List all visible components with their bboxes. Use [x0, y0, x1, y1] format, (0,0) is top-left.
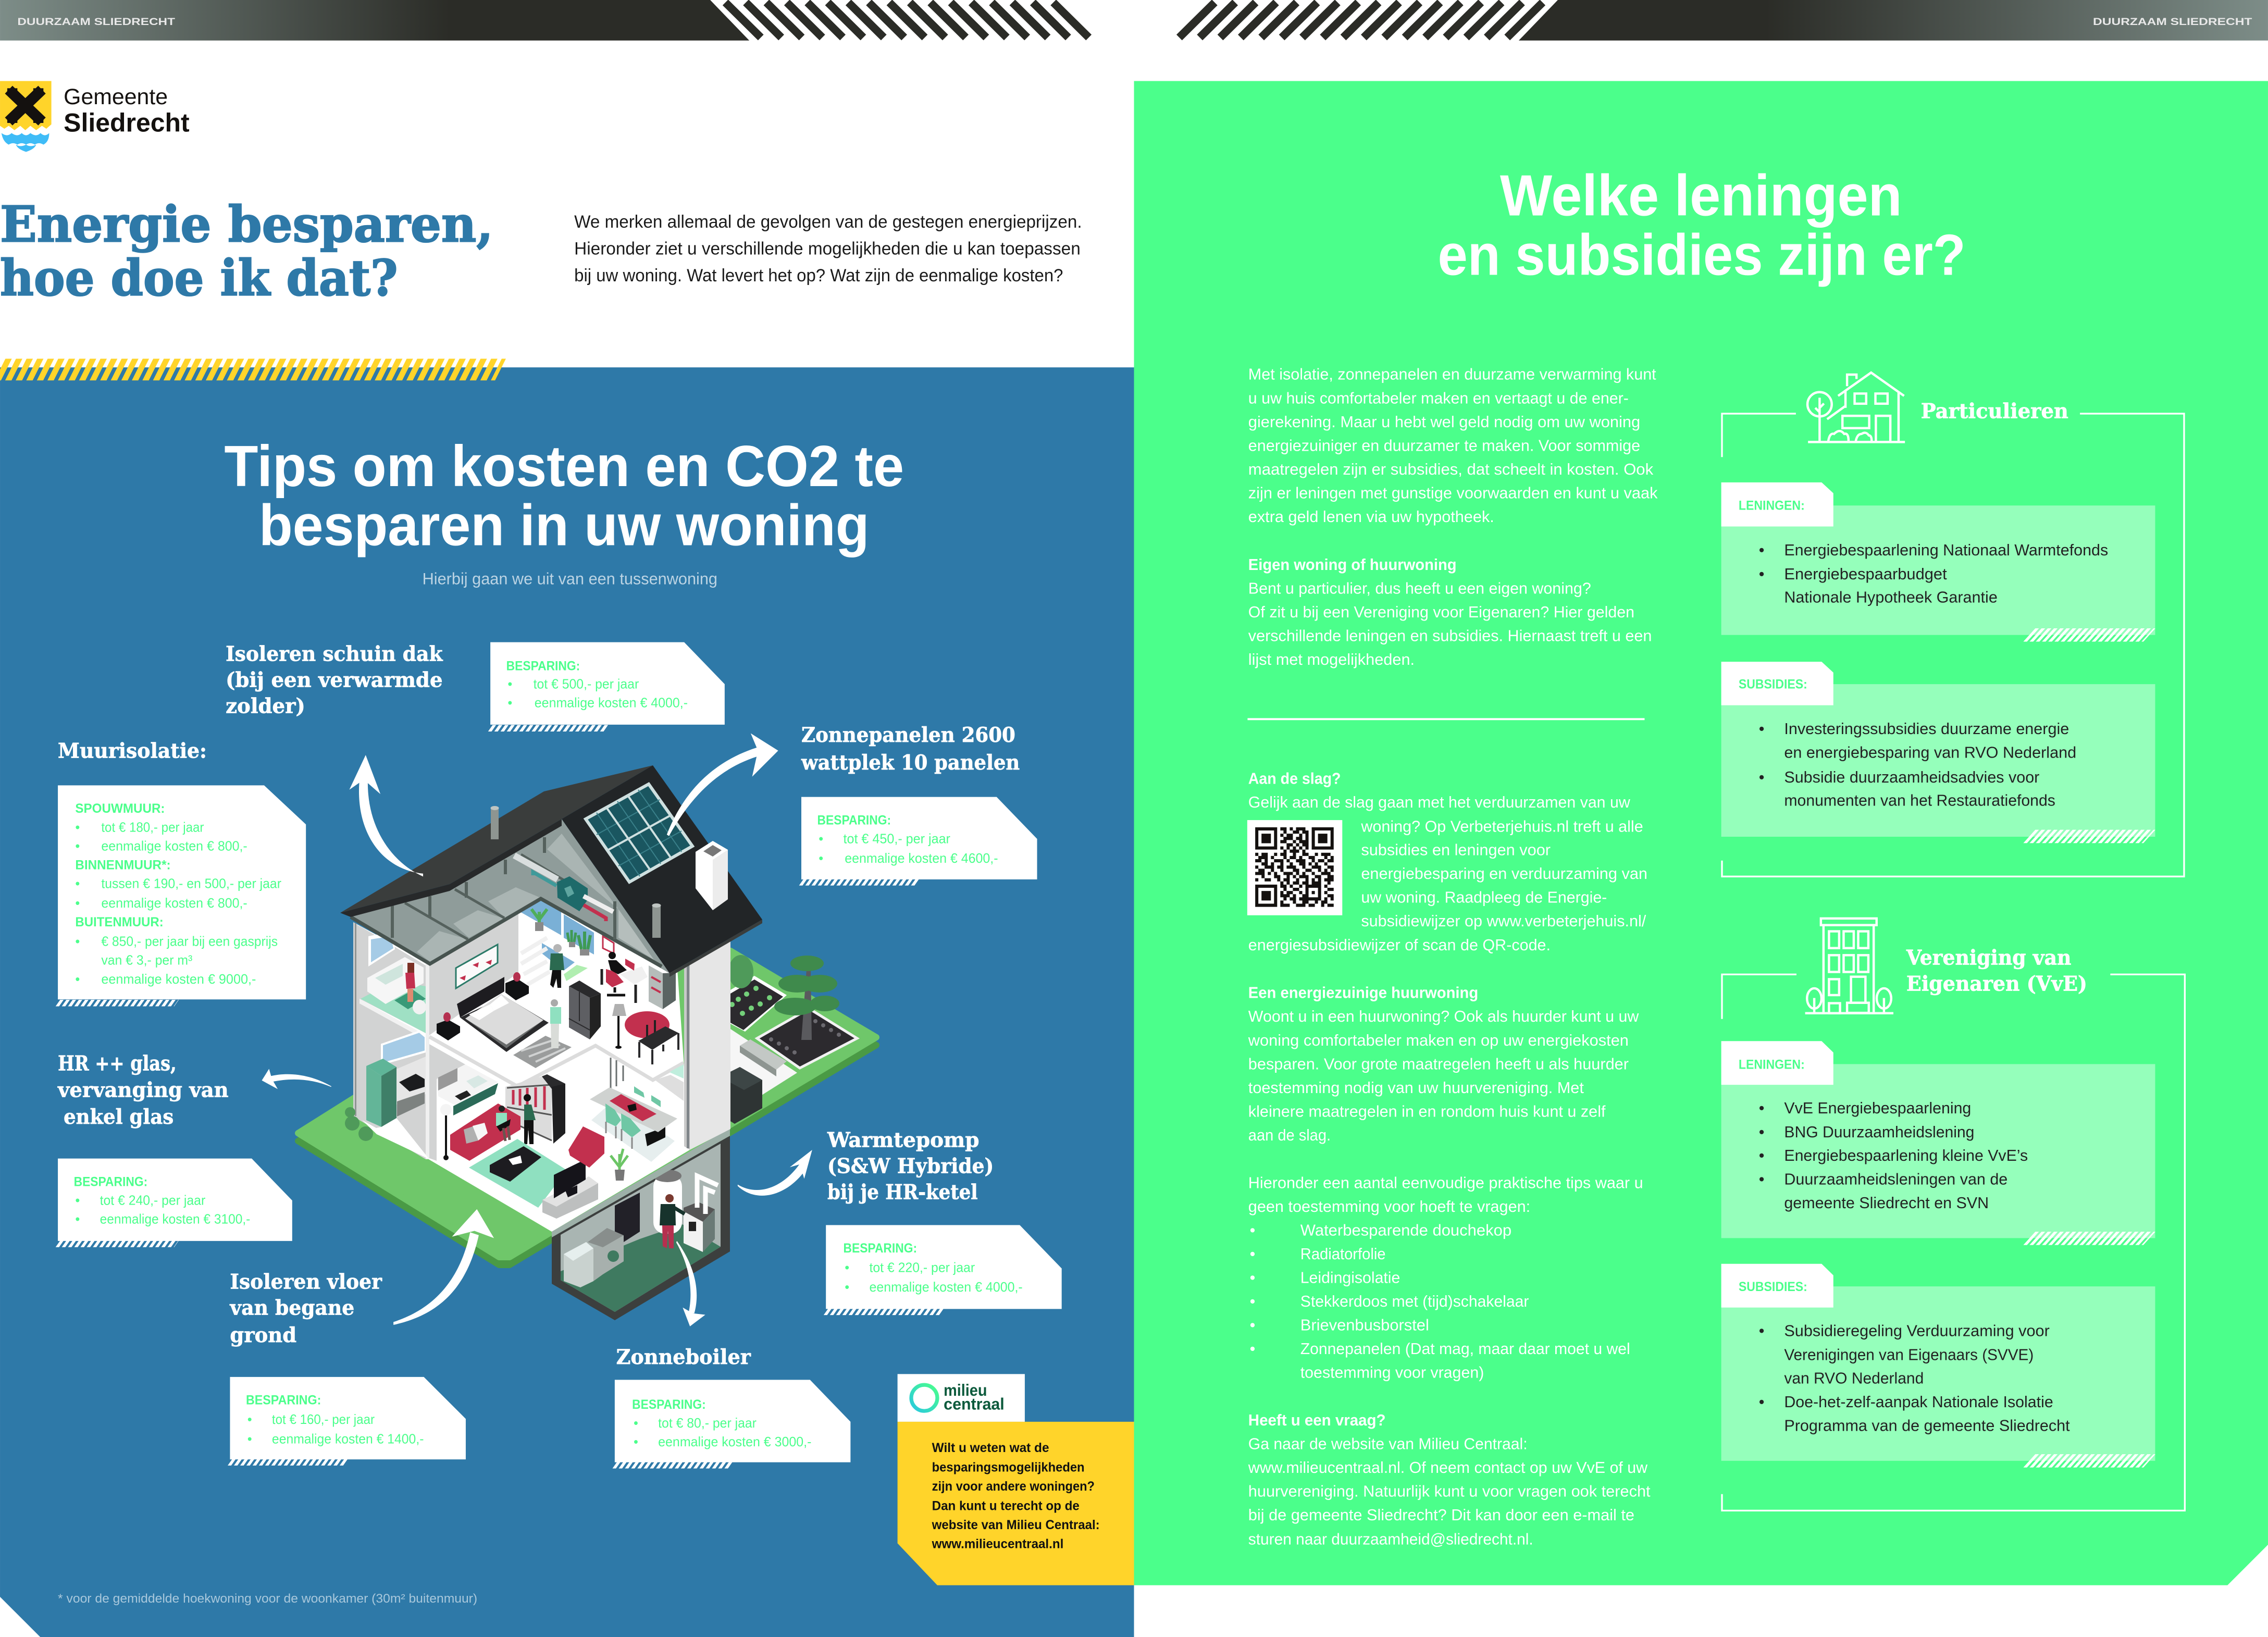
text block: questions: Heeft u een vraag?: [1248, 1411, 1386, 1429]
card: roof insulation savings: BESPARING:: [506, 659, 580, 674]
right gable wall: [684, 941, 730, 1150]
card: private subsidies: •: [1759, 720, 1764, 738]
arrow: floor insulation: [393, 1209, 494, 1325]
text block: get started: Aan de slag?: [1248, 770, 1341, 788]
card: private loans: •: [1759, 541, 1764, 559]
text block: get started: [1248, 770, 1647, 954]
card: glass savings: BESPARING:: [74, 1174, 147, 1189]
heading: tips: Tips om kosten en CO2 te: [224, 433, 904, 499]
text block: introduction: zijn er leningen met gunstige voorwaarden en kunt u vaak: [1248, 485, 1658, 502]
card: association loans: VvE Energiebespaarlening: [1784, 1099, 1971, 1117]
card: solar savings: •: [819, 851, 823, 866]
logo: Gemeente Sliedrecht: Gemeente: [64, 84, 168, 109]
card: floor savings: tot € 160,- per jaar: [272, 1412, 375, 1427]
card: heat pump savings: BESPARING:: [844, 1241, 917, 1256]
card: wall insulation savings: tot € 180,- per jaar: [101, 820, 204, 835]
card: roof insulation savings: eenmalige kosten € 4000,-: [535, 696, 688, 711]
arrow: glass: [262, 1069, 331, 1089]
wardrobe: [569, 981, 601, 1039]
card: private loans: LENINGEN:: [1739, 499, 1805, 513]
text block: practical tips list: Stekkerdoos met (tijd)schakelaar: [1300, 1293, 1529, 1310]
intro text: bij uw woning. Wat levert het op? Wat zijn de eenmalige kosten?: [574, 266, 1063, 286]
card: roof insulation savings: [490, 642, 725, 728]
card: private loans: Nationale Hypotheek Garantie: [1784, 589, 1998, 606]
card: solar boiler savings: [615, 1380, 850, 1465]
panel: blue tips panel: [0, 367, 1134, 1637]
callout: more information: www.milieucentraal.nl: [932, 1537, 1063, 1552]
label: roof insulation: Isoleren schuin dak: [226, 643, 443, 666]
card: wall insulation savings: van € 3,- per m³: [101, 953, 192, 968]
card: private loans: Energiebespaarlening Nationaal Warmtefonds: [1784, 541, 2108, 559]
bathroom: [360, 926, 426, 1040]
vent pipe on right roof: [652, 903, 661, 938]
label: heat pump: Warmtepomp: [827, 1128, 979, 1152]
text block: get started: woning? Op Verbeterjehuis.nl treft u alle: [1360, 817, 1643, 835]
boiler: [684, 1176, 718, 1252]
sink and washer: [564, 1228, 624, 1287]
plants by window: [531, 909, 590, 956]
card: wall insulation savings: •: [75, 935, 80, 949]
heading: Vereniging van Eigenaren: Vereniging van: [1906, 947, 2071, 970]
label: HR glass: vervanging van: [57, 1079, 229, 1102]
pendant lamps: [611, 1058, 623, 1092]
card: floor savings: BESPARING:: [246, 1393, 321, 1408]
text block: get started: subsidies en leningen voor: [1361, 841, 1551, 859]
card: floor savings: [230, 1377, 466, 1462]
bedroom rug: [513, 1036, 572, 1068]
nightstands: [437, 972, 529, 1040]
card: wall insulation savings: •: [75, 896, 80, 911]
card: private loans: [1721, 482, 2155, 635]
upper floor front edge: [429, 1037, 684, 1086]
card: association subsidies: Subsidieregeling Verduurzaming voor: [1784, 1322, 2050, 1340]
label: floor insulation: Isoleren vloer: [230, 1271, 382, 1294]
ventilation unit: [514, 855, 613, 921]
wall painting: [456, 945, 498, 988]
heading: loans and subsidies: en subsidies zijn er?: [1437, 222, 1966, 287]
card: association loans: •: [1759, 1123, 1764, 1141]
card: association loans: LENINGEN:: [1739, 1058, 1805, 1072]
card: wall insulation savings: tussen € 190,- en 500,- per jaar: [101, 877, 281, 891]
hot water tank: [653, 1170, 682, 1234]
text block: practical tips list: [1248, 1174, 1643, 1382]
text block: practical tips list: toestemming voor vragen): [1300, 1364, 1484, 1382]
icon: house: [1807, 373, 1905, 442]
card: wall insulation savings: •: [75, 839, 80, 853]
intro text: We merken allemaal de gevolgen van de gestegen energieprijzen.: [574, 212, 1082, 232]
card: wall insulation savings: eenmalige kosten € 800,-: [101, 839, 247, 853]
floor slab edge: [552, 1128, 730, 1237]
label: roof insulation: zolder): [226, 695, 305, 718]
card: wall insulation savings: BINNENMUUR*:: [75, 858, 171, 872]
label: roof insulation: [226, 643, 443, 718]
text block: rental home: woning comfortabeler maken en op uw energiekosten: [1248, 1032, 1629, 1049]
text block: get started: Gelijk aan de slag gaan met het verduurzamen van uw: [1248, 793, 1631, 811]
callout: more information: website van Milieu Centraal:: [932, 1518, 1100, 1532]
callout: more information: besparingsmogelijkheden: [932, 1460, 1085, 1474]
card: heat pump savings: tot € 220,- per jaar: [869, 1261, 975, 1275]
text block: get started: uw woning. Raadpleeg de Energie-: [1361, 888, 1607, 906]
text block: questions: bij de gemeente Sliedrecht? Dit kan door een e-mail te: [1248, 1506, 1634, 1524]
header bar right: DUURZAAM SLIEDRECHT: [2093, 16, 2252, 28]
card: association loans: [1721, 1041, 2155, 1238]
bedroom wall: [429, 913, 518, 1035]
text block: practical tips list: geen toestemming voor hoeft te vragen:: [1248, 1198, 1530, 1216]
logo: Gemeente Sliedrecht: [0, 81, 190, 152]
card: glass savings: tot € 240,- per jaar: [100, 1193, 206, 1208]
logo: Gemeente Sliedrecht: Sliedrecht: [64, 108, 190, 138]
title: Energie besparen: hoe doe ik dat?: [0, 249, 398, 307]
text block: own home or rental: Of zit u bij een Vereniging voor Eigenaren? Hier gelden: [1248, 603, 1634, 621]
arrow: solar boiler: [676, 1241, 705, 1326]
card: association loans: BNG Duurzaamheidslening: [1784, 1123, 1974, 1141]
card: association subsidies: Verenigingen van Eigenaars (SVVE): [1784, 1346, 2034, 1364]
card: heat pump savings: •: [845, 1280, 849, 1295]
card: private loans: Energiebespaarbudget: [1784, 565, 1947, 583]
card: private loans: •: [1759, 565, 1764, 583]
patio and bench: [730, 1029, 797, 1115]
bushes: [345, 1107, 373, 1141]
text block: introduction: extra geld lenen via uw hypotheek.: [1248, 508, 1494, 526]
card: wall insulation savings: BUITENMUUR:: [75, 915, 164, 929]
card: heat pump savings: •: [845, 1261, 849, 1275]
card: heat pump savings: [826, 1225, 1062, 1312]
card: private subsidies: •: [1759, 768, 1764, 786]
text block: practical tips list: •: [1250, 1221, 1255, 1239]
coffee table: [490, 1146, 541, 1182]
card: association subsidies: •: [1759, 1393, 1764, 1411]
card: association loans: •: [1759, 1171, 1764, 1188]
label: HR glass: [57, 1052, 229, 1129]
kitchen unit: [429, 1044, 498, 1161]
bookcase: [505, 1074, 565, 1144]
label: HR glass: enkel glas: [64, 1106, 173, 1129]
basement: [552, 1136, 730, 1320]
person with glasses: [550, 944, 564, 988]
icon: municipal shield: [0, 81, 52, 152]
card: private subsidies: Subsidie duurzaamheidsadvies voor: [1784, 768, 2039, 786]
armchair: [568, 1126, 604, 1168]
card: glass savings: [58, 1159, 292, 1244]
potted plant: [611, 1149, 628, 1181]
card: solar savings: tot € 450,- per jaar: [844, 832, 950, 846]
arrow: roof insulation: [349, 755, 423, 876]
card: private subsidies: en energiebesparing van RVO Nederland: [1784, 744, 2076, 762]
logo: Milieu Centraal: centraal: [944, 1395, 1005, 1413]
illustration: isometric house cross-section: [298, 765, 876, 1320]
callout: more information: Wilt u weten wat de: [932, 1441, 1049, 1455]
text block: practical tips list: •: [1250, 1340, 1255, 1358]
text block: practical tips list: •: [1250, 1293, 1255, 1310]
panel: owners associations: [1721, 919, 2185, 1510]
text block: rental home: aan de slag.: [1248, 1126, 1331, 1144]
arrow: solar panels: [667, 733, 778, 836]
label: solar panels: [801, 724, 1020, 775]
heading: tips: besparen in uw woning: [259, 493, 869, 558]
card: wall insulation savings: •: [75, 972, 80, 987]
tree bed: [757, 956, 857, 1068]
round rug and table: [625, 1011, 679, 1064]
heat pump outdoor unit: [730, 1067, 762, 1124]
label: heat pump: bij je HR-ketel: [827, 1181, 978, 1204]
back windows: [520, 900, 594, 981]
chimney: [696, 841, 728, 910]
card: roof insulation savings: •: [507, 677, 512, 691]
card: association subsidies: •: [1759, 1322, 1764, 1340]
text block: rental home: Woont u in een huurwoning? Ook als huurder kunt u uw: [1248, 1008, 1639, 1025]
text block: questions: www.milieucentraal.nl. Of neem contact op uw VvE of uw: [1248, 1459, 1648, 1477]
ground plate: [298, 951, 876, 1265]
fridge foreground floor: [362, 1118, 429, 1159]
floor lamp lower: [440, 1104, 452, 1160]
card: solar boiler savings: •: [634, 1435, 638, 1449]
fridge: [366, 1059, 396, 1127]
card: private subsidies: Investeringssubsidies duurzame energie: [1784, 720, 2069, 738]
card: association subsidies: Programma van de gemeente Sliedrecht: [1784, 1417, 2070, 1435]
text block: introduction: [1248, 366, 1658, 526]
QR code: [1247, 820, 1342, 915]
card: glass savings: eenmalige kosten € 3100,-: [100, 1212, 250, 1227]
arrow: heat pump: [738, 1150, 812, 1196]
card: private subsidies: SUBSIDIES:: [1739, 677, 1807, 691]
label: floor insulation: van begane: [229, 1296, 354, 1320]
text block: get started: energiesubsidiewijzer of scan de QR-code.: [1248, 936, 1551, 954]
intro text: Hieronder ziet u verschillende mogelijkheden die u kan toepassen: [574, 239, 1081, 259]
header bar left: DUURZAAM SLIEDRECHT: [17, 16, 175, 28]
label: solar panels: Zonnepanelen 2600: [801, 724, 1015, 747]
text block: rental home: kleinere maatregelen in en rondom huis kunt u zelf: [1248, 1103, 1606, 1121]
panel: green loans and subsidies panel: [1134, 81, 2268, 1585]
label: heat pump: [827, 1128, 994, 1204]
intro text: [574, 212, 1082, 286]
card: heat pump savings: eenmalige kosten € 4000,-: [869, 1280, 1023, 1295]
text block: rental home: Een energiezuinige huurwoning: [1248, 984, 1478, 1002]
card: solar boiler savings: BESPARING:: [632, 1397, 706, 1412]
text block: practical tips list: Zonnepanelen (Dat mag, maar daar moet u wel: [1300, 1340, 1630, 1358]
vent pipe on left roof: [491, 806, 499, 839]
card: private subsidies: [1721, 662, 2155, 837]
label: wall insulation: Muurisolatie:: [58, 740, 207, 763]
text block: introduction: energiezuiniger en duurzamer te maken. Voor sommige: [1248, 437, 1640, 454]
card: floor savings: •: [247, 1432, 252, 1447]
card: solar boiler savings: tot € 80,- per jaar: [658, 1416, 757, 1431]
card: wall insulation savings: € 850,- per jaar bij een gasprijs: [101, 935, 278, 949]
label: floor insulation: [229, 1271, 382, 1347]
heading: loans and subsidies: Welke leningen: [1500, 163, 1902, 228]
card: wall insulation savings: SPOUWMUUR:: [75, 801, 165, 816]
card: floor savings: eenmalige kosten € 1400,-: [272, 1432, 424, 1447]
callout: more information: zijn voor andere woningen?: [932, 1479, 1095, 1494]
text block: questions: [1248, 1411, 1651, 1548]
heading: loans and subsidies: [1437, 163, 1966, 287]
card: association loans: Energiebespaarlening kleine VvE’s: [1784, 1147, 2028, 1164]
interior floor base: [353, 899, 690, 1232]
card: association subsidies: [1721, 1264, 2155, 1461]
solar panels: [586, 784, 692, 882]
mint rug: [469, 1139, 567, 1208]
card: wall insulation savings: eenmalige kosten € 9000,-: [101, 972, 256, 987]
card: wall insulation savings: eenmalige kosten € 800,-: [101, 896, 247, 911]
subtitle: Hierbij gaan we uit van een tussenwoning: [423, 569, 717, 588]
card: wall insulation savings: •: [75, 877, 80, 891]
text block: practical tips list: Waterbesparende douchekop: [1300, 1221, 1511, 1239]
card: private subsidies: monumenten van het Restauratiefonds: [1784, 791, 2055, 809]
text block: questions: huurvereniging. Natuurlijk kunt u voor vragen ook terecht: [1248, 1483, 1651, 1500]
sofa: [450, 1103, 520, 1161]
dining table: [590, 1086, 677, 1162]
label: solar panels: wattplek 10 panelen: [801, 751, 1020, 775]
text block: introduction: Met isolatie, zonnepanelen en duurzame verwarming kunt: [1248, 366, 1656, 383]
title: Energie besparen: Energie besparen,: [0, 196, 493, 254]
card: association loans: Duurzaamheidsleningen van de: [1784, 1171, 2007, 1188]
left exterior wall: [353, 922, 360, 1120]
text block: practical tips list: •: [1250, 1316, 1255, 1334]
text block: rental home: besparen. Voor grote maatregelen heeft u als huurder: [1248, 1055, 1629, 1073]
text block: get started: energiebesparing en verduurzaming van: [1361, 865, 1647, 883]
center divider wall: [426, 964, 429, 1159]
logo: Milieu Centraal: [898, 1374, 1025, 1422]
text block: questions: Ga naar de website van Milieu Centraal:: [1248, 1435, 1528, 1453]
card: association loans: •: [1759, 1099, 1764, 1117]
label: roof insulation: (bij een verwarmde: [226, 669, 443, 692]
card: association subsidies: SUBSIDIES:: [1739, 1280, 1807, 1294]
desk and person: [602, 936, 648, 1003]
lower wall and mint corner: [655, 1064, 684, 1101]
text block: practical tips list: •: [1250, 1245, 1255, 1263]
text block: practical tips list: Hieronder een aantal eenvoudige praktische tips waar u: [1248, 1174, 1643, 1192]
title: Energie besparen: [0, 196, 493, 307]
card: wall insulation savings: •: [75, 820, 80, 835]
heading: tips: [224, 433, 904, 558]
text block: own home or rental: [1248, 556, 1652, 668]
card: floor savings: •: [247, 1412, 252, 1427]
card: association loans: •: [1759, 1147, 1764, 1164]
person at bookcase: [524, 1094, 536, 1144]
card: solar boiler savings: •: [634, 1416, 638, 1431]
label: floor insulation: grond: [230, 1324, 296, 1347]
card: solar boiler savings: eenmalige kosten € 3000,-: [658, 1435, 811, 1449]
logo: Milieu Centraal: milieu: [944, 1381, 987, 1399]
label: solar boiler: Zonneboiler: [616, 1346, 751, 1369]
stairs: [521, 938, 550, 985]
text block: rental home: toestemming nodig van uw huurvereniging. Met: [1248, 1079, 1584, 1097]
card: solar savings: [801, 797, 1037, 882]
label: heat pump: (S&W Hybride): [827, 1155, 994, 1178]
text block: rental home: [1248, 984, 1639, 1144]
card: solar savings: eenmalige kosten € 4600,-: [845, 851, 998, 866]
card: association subsidies: Doe-het-zelf-aanpak Nationale Isolatie: [1784, 1393, 2053, 1411]
card: glass savings: •: [75, 1212, 80, 1227]
footnote: * voor de gemiddelde hoekwoning voor de woonkamer (30m² buitenmuur): [58, 1592, 477, 1605]
card: solar savings: •: [819, 832, 823, 846]
floor lamp: [612, 1004, 626, 1049]
wall shelf: [649, 965, 676, 1009]
text block: practical tips list: Brievenbusborstel: [1300, 1316, 1429, 1334]
header bar right: [1179, 0, 2268, 41]
person at boiler: [660, 1194, 685, 1248]
label: HR glass: HR ++ glas,: [58, 1052, 177, 1075]
roof right slope: [562, 765, 762, 977]
heading: Particulieren: Particulieren: [1921, 400, 2068, 423]
text block: own home or rental: Bent u particulier, dus heeft u een eigen woning?: [1248, 579, 1591, 597]
icon: apartment building: [1805, 919, 1893, 1013]
callout: more information: [898, 1422, 1134, 1585]
card: glass savings: •: [75, 1193, 80, 1208]
heading: Vereniging van Eigenaren: [1906, 947, 2087, 996]
text block: practical tips list: Leidingisolatie: [1300, 1269, 1400, 1286]
text block: get started: subsidiewijzer op www.verbeterjehuis.nl/: [1361, 912, 1646, 930]
text block: practical tips list: •: [1250, 1269, 1255, 1286]
bed: [457, 977, 549, 1052]
heading: Vereniging van Eigenaren: Eigenaren (VvE): [1906, 973, 2087, 996]
panel: private owners: [1721, 373, 2184, 876]
card: roof insulation savings: tot € 500,- per jaar: [534, 677, 639, 691]
card: roof insulation savings: •: [507, 696, 512, 711]
roof left slope: [340, 765, 653, 917]
vegetable plot: [728, 955, 787, 1032]
tv unit: [542, 1159, 598, 1219]
card: association subsidies: van RVO Nederland: [1784, 1370, 1924, 1387]
attic: [351, 819, 670, 973]
header bar left: [0, 0, 1089, 41]
card: solar savings: BESPARING:: [817, 813, 891, 827]
text block: own home or rental: lijst met mogelijkheden.: [1248, 651, 1415, 668]
card: association loans: gemeente Sliedrecht en SVN: [1784, 1194, 1989, 1212]
text block: practical tips list: Radiatorfolie: [1300, 1245, 1386, 1263]
text block: introduction: maatregelen zijn er subsidies, dat scheelt in kosten. Ook: [1248, 461, 1654, 478]
kitchen wall: [360, 1003, 426, 1159]
text block: questions: sturen naar duurzaamheid@sliedrecht.nl.: [1248, 1530, 1533, 1548]
text block: introduction: u uw huis comfortabeler maken en vertaagt u de ener-: [1248, 390, 1629, 407]
text block: own home or rental: Eigen woning of huurwoning: [1248, 556, 1457, 574]
woman in mint top: [550, 999, 561, 1048]
callout: more information: Dan kunt u terecht op de: [932, 1498, 1080, 1513]
text block: own home or rental: verschillende leningen en subsidies. Hiernaast treft u een: [1248, 627, 1652, 644]
card: wall insulation savings: [58, 785, 306, 1003]
text block: introduction: gierekening. Maar u hebt wel geld nodig om uw woning: [1248, 413, 1640, 431]
